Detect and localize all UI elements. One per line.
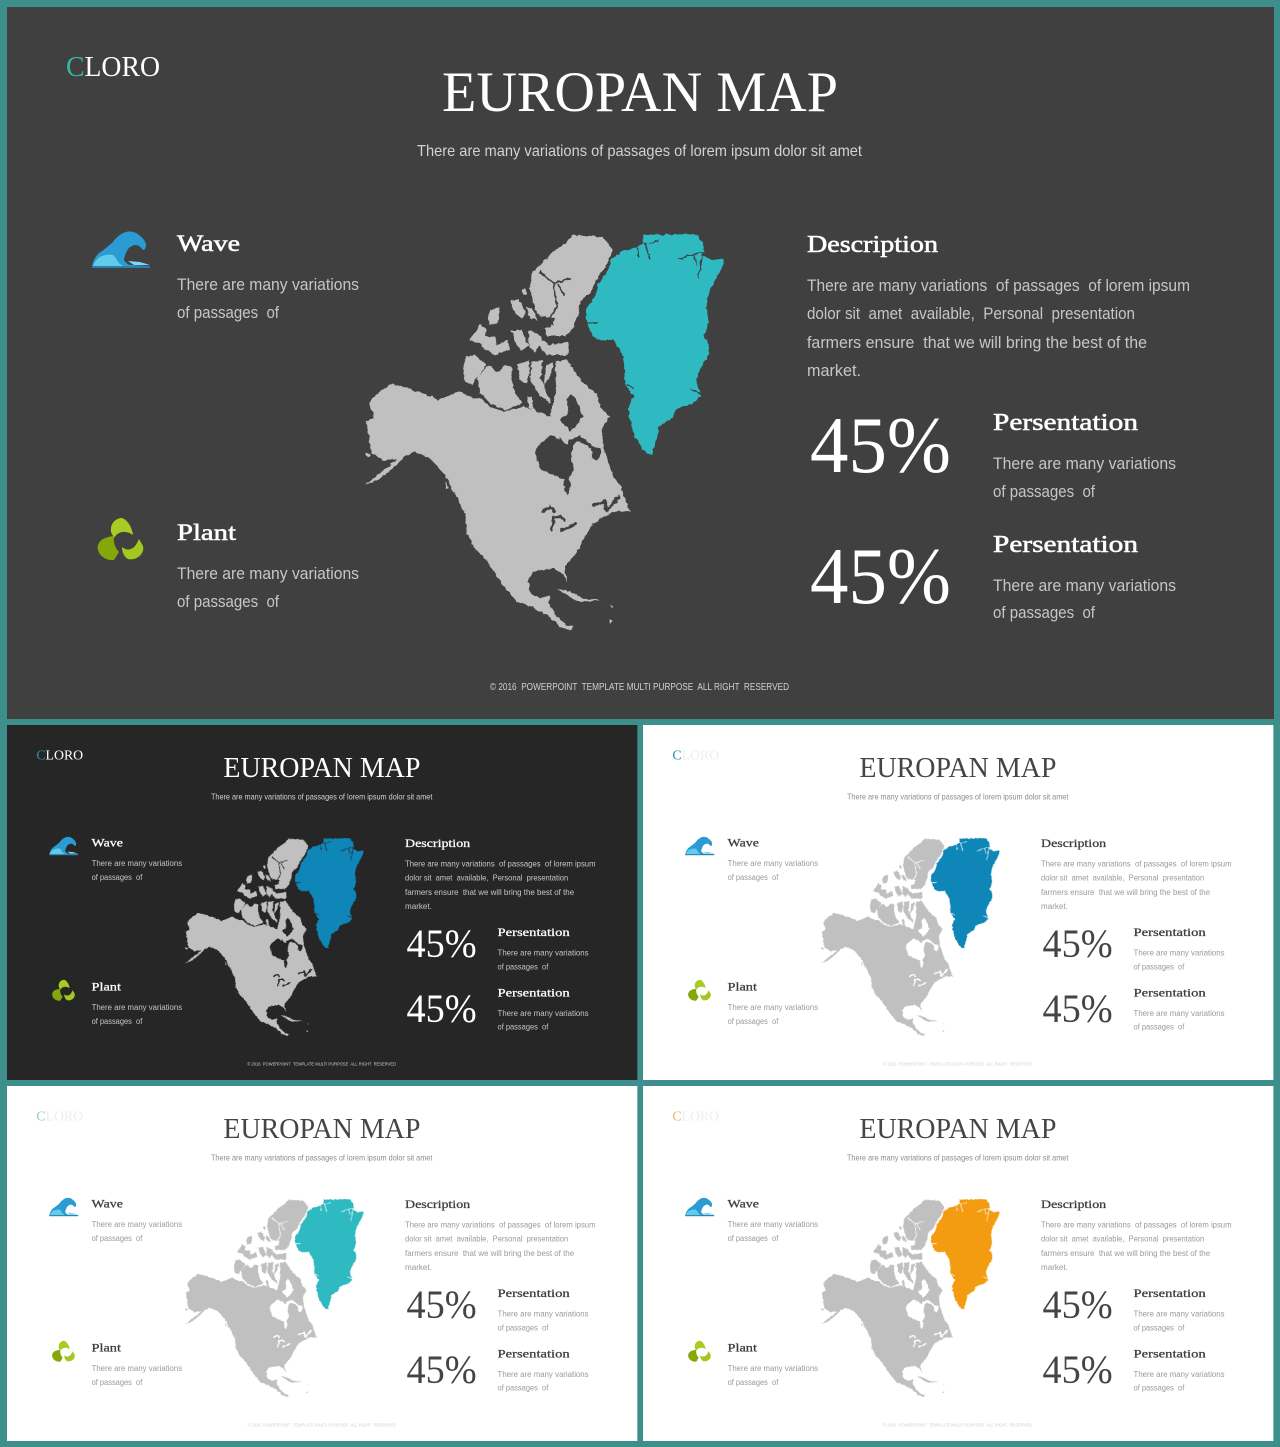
slide background [7,725,637,1080]
logo: CLORO [672,748,719,763]
text: presentation second: of passages of [498,1383,549,1393]
heading: description: Description [1041,836,1106,850]
text: wave description [92,1219,182,1243]
text: presentation first: of passages of [1134,1322,1185,1332]
logo: CLORO [672,1109,719,1124]
title: EUROPAN MAP [223,753,420,784]
text: presentation first [1134,1308,1225,1332]
text: presentation second: of passages of [1134,1383,1185,1393]
text: presentation second: There are many variations [1134,1008,1225,1018]
text: plant description: of passages of [728,1377,779,1387]
heading: plant: Plant [92,1343,122,1355]
heading: presentation second: Persentation [498,1347,570,1361]
heading: presentation first: Persentation [498,925,570,939]
text: wave description: of passages of [92,872,143,882]
heading: plant: Plant [177,520,237,545]
slide: small white blue variant [643,725,1273,1080]
stat: 45% second: 45% [406,1347,477,1392]
text: description paragraph: dolor sit amet available, Personal presentation [1041,1234,1204,1244]
heading: description: Description [1041,1197,1106,1211]
text: description paragraph: There are many variations of passages of lorem ipsum [1041,859,1232,869]
text: plant description: of passages of [177,592,279,611]
icon: plant [52,980,75,1001]
stat: 45% first: 45% [406,1282,477,1327]
text: presentation first: There are many variations [498,1308,589,1318]
stat: 45% second: 45% [406,986,477,1031]
text: description paragraph: farmers ensure that we will bring the best of the [405,887,574,897]
text: description paragraph: dolor sit amet available, Personal presentation [1041,873,1204,883]
text: presentation first [993,454,1176,501]
title: EUROPAN MAP [223,1114,420,1145]
text: wave description: of passages of [728,872,779,882]
icon: wave [685,1198,714,1216]
map: north america and greenland [185,838,363,1036]
stat: 45% first: 45% [406,921,477,966]
text: presentation second: of passages of [1134,1022,1185,1032]
logo: CLORO [36,748,83,763]
text: wave description: There are many variations [728,858,818,868]
icon: wave [685,837,714,855]
text: presentation second [993,576,1176,622]
footer: © 2016 POWERPOINT TEMPLATE MULTI PURPOSE ALL RIGHT RESERVED [883,1061,1032,1068]
text: presentation second: of passages of [498,1022,549,1032]
map: north america and greenland [821,1199,999,1397]
heading: presentation first: Persentation [498,1286,570,1300]
text: wave description: There are many variations [728,1219,818,1229]
slide: main dark grey [7,7,1274,719]
slide background [7,7,1274,719]
text: presentation second: of passages of [993,603,1095,622]
text: description paragraph: farmers ensure that we will bring the best of the [1041,1248,1210,1258]
slide: small white teal variant [7,1086,637,1441]
text: presentation first: of passages of [993,482,1095,501]
subtitle: There are many variations of passages of lorem ipsum dolor sit amet [847,792,1069,801]
text: description paragraph [405,859,596,911]
stat: 45% first: 45% [810,402,951,490]
text: presentation first: There are many variations [1134,1308,1225,1318]
heading: presentation second: Persentation [498,986,570,1000]
logo: CLORO [36,1109,83,1124]
icon: plant [688,1341,711,1362]
logo: CLORO [66,52,160,83]
text: plant description: of passages of [728,1016,779,1026]
text: description paragraph: market. [1041,901,1068,911]
text: description paragraph: farmers ensure that we will bring the best of the [807,333,1147,352]
icon: plant [98,518,143,560]
stat: 45% first: 45% [1042,921,1113,966]
heading: presentation first: Persentation [1134,925,1206,939]
text: plant description: There are many variations [92,1002,182,1012]
text: presentation first [1134,947,1225,971]
map: north america and greenland [821,838,999,1036]
title: EUROPAN MAP [859,753,1056,784]
text: presentation first: There are many variations [993,454,1176,473]
text: wave description: of passages of [177,303,279,322]
text: presentation first: of passages of [498,961,549,971]
text: description paragraph: There are many variations of passages of lorem ipsum [405,1220,596,1230]
text: presentation first [498,1308,589,1332]
footer: © 2016 POWERPOINT TEMPLATE MULTI PURPOSE ALL RIGHT RESERVED [883,1422,1032,1429]
map: north america and greenland [365,234,723,630]
text: description paragraph [405,1220,596,1272]
text: wave description: There are many variations [177,275,359,294]
text: presentation second: There are many variations [1134,1369,1225,1379]
text: plant description [92,1363,182,1387]
text: description paragraph: market. [405,1262,432,1272]
slide: small white orange variant [643,1086,1273,1441]
text: description paragraph: dolor sit amet available, Personal presentation [405,1234,568,1244]
heading: wave: Wave [92,838,123,850]
text: presentation first: of passages of [498,1322,549,1332]
heading: presentation first: Persentation [1134,1286,1206,1300]
stat: 45% first: 45% [1042,1282,1113,1327]
text: wave description [728,858,818,882]
subtitle: There are many variations of passages of lorem ipsum dolor sit amet [847,1153,1069,1162]
text: presentation second [1134,1008,1225,1032]
text: plant description: There are many variations [728,1363,818,1373]
text: presentation second [1134,1369,1225,1393]
text: presentation second: There are many variations [498,1008,589,1018]
text: description paragraph: There are many variations of passages of lorem ipsum [405,859,596,869]
text: presentation second: There are many variations [498,1369,589,1379]
text: description paragraph: farmers ensure that we will bring the best of the [405,1248,574,1258]
text: wave description: of passages of [728,1233,779,1243]
subtitle: There are many variations of passages of lorem ipsum dolor sit amet [211,1153,433,1162]
text: description paragraph: dolor sit amet available, Personal presentation [405,873,568,883]
heading: plant: Plant [728,1343,758,1355]
heading: wave: Wave [728,1199,759,1211]
heading: presentation second: Persentation [993,532,1138,558]
slide background [643,725,1273,1080]
text: plant description: There are many variations [92,1363,182,1373]
text: wave description [92,858,182,882]
heading: presentation first: Persentation [993,410,1138,436]
text: presentation first: of passages of [1134,961,1185,971]
heading: description: Description [807,232,938,258]
slide background [643,1086,1273,1441]
icon: wave [92,232,150,268]
title: EUROPAN MAP [859,1114,1056,1145]
text: description paragraph [1041,859,1232,911]
text: wave description [177,275,359,322]
text: presentation first: There are many variations [498,947,589,957]
text: presentation second [498,1369,589,1393]
subtitle: There are many variations of passages of lorem ipsum dolor sit amet [417,143,863,160]
text: description paragraph: There are many variations of passages of lorem ipsum [1041,1220,1232,1230]
text: plant description [177,564,359,611]
text: plant description: There are many variations [177,564,359,583]
heading: wave: Wave [728,838,759,850]
text: wave description: There are many variations [92,1219,182,1229]
text: wave description [728,1219,818,1243]
text: plant description: There are many variations [728,1002,818,1012]
slide: small black variant [7,725,637,1080]
icon: wave [49,1198,78,1216]
heading: plant: Plant [92,982,122,994]
text: plant description: of passages of [92,1377,143,1387]
subtitle: There are many variations of passages of lorem ipsum dolor sit amet [211,792,433,801]
heading: wave: Wave [92,1199,123,1211]
footer: © 2016 POWERPOINT TEMPLATE MULTI PURPOSE ALL RIGHT RESERVED [247,1061,396,1068]
text: description paragraph: market. [807,361,861,380]
text: presentation second: There are many variations [993,576,1176,595]
text: description paragraph: market. [1041,1262,1068,1272]
slide background [7,1086,637,1441]
text: presentation first [498,947,589,971]
text: description paragraph: dolor sit amet available, Personal presentation [807,304,1135,323]
heading: wave: Wave [177,231,240,256]
stat: 45% second: 45% [1042,986,1113,1031]
icon: plant [52,1341,75,1362]
text: description paragraph [1041,1220,1232,1272]
stat: 45% second: 45% [1042,1347,1113,1392]
text: description paragraph: There are many variations of passages of lorem ipsum [807,276,1190,295]
text: presentation first: There are many variations [1134,947,1225,957]
text: description paragraph: farmers ensure that we will bring the best of the [1041,887,1210,897]
footer: © 2016 POWERPOINT TEMPLATE MULTI PURPOSE ALL RIGHT RESERVED [490,682,789,693]
text: description paragraph: market. [405,901,432,911]
text: plant description [728,1363,818,1387]
icon: wave [49,837,78,855]
text: description paragraph [807,276,1190,380]
text: presentation second [498,1008,589,1032]
heading: presentation second: Persentation [1134,986,1206,1000]
text: plant description [92,1002,182,1026]
heading: description: Description [405,1197,470,1211]
footer: © 2016 POWERPOINT TEMPLATE MULTI PURPOSE ALL RIGHT RESERVED [247,1422,396,1429]
heading: presentation second: Persentation [1134,1347,1206,1361]
text: plant description [728,1002,818,1026]
map: north america and greenland [185,1199,363,1397]
heading: plant: Plant [728,982,758,994]
icon: plant [688,980,711,1001]
stat: 45% second: 45% [810,533,951,621]
heading: description: Description [405,836,470,850]
text: wave description: There are many variations [92,858,182,868]
text: plant description: of passages of [92,1016,143,1026]
title: EUROPAN MAP [442,61,838,124]
text: wave description: of passages of [92,1233,143,1243]
